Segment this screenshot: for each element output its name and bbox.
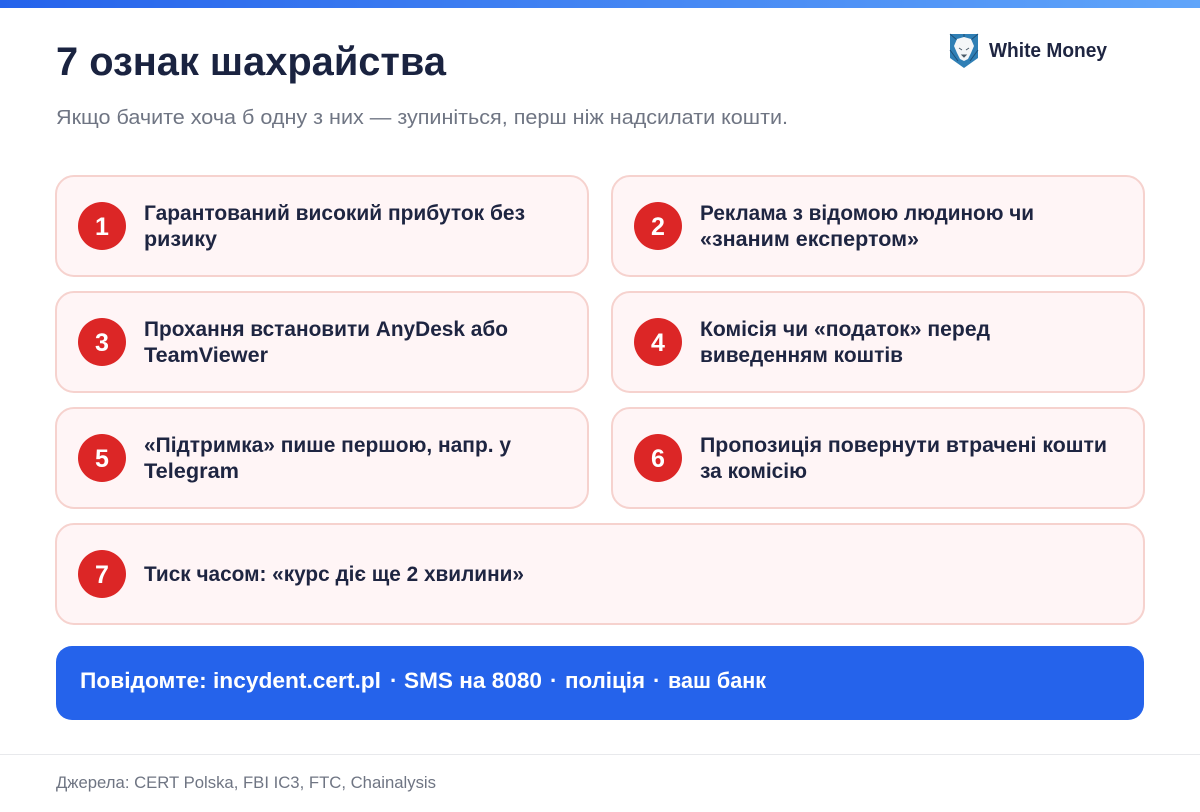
number badge 4: 4	[651, 329, 665, 357]
subtitle: Якщо бачите хоча б одну з них — зупиніться, перш ніж надсилати кошти.	[56, 107, 788, 129]
number badge 7	[78, 550, 126, 598]
card 6 text: за комісію	[700, 460, 807, 483]
banner text	[80, 668, 767, 693]
card 4 text	[700, 318, 990, 367]
banner text: ваш банк	[668, 668, 767, 693]
card 1	[56, 176, 588, 276]
top accent bar	[0, 0, 1200, 8]
number badge 6	[634, 434, 682, 482]
number badge 1	[78, 202, 126, 250]
card 6 text	[700, 434, 1107, 483]
number badge 1: 1	[95, 213, 109, 241]
banner text: Повідомте: incydent.cert.pl	[80, 668, 381, 693]
card 4	[612, 292, 1144, 392]
banner text: поліція	[565, 668, 645, 693]
card 5	[56, 408, 588, 508]
number badge 2: 2	[651, 213, 665, 241]
card 3 text	[144, 318, 508, 367]
number badge 3: 3	[95, 329, 109, 357]
card 7	[56, 524, 1144, 624]
card 6 text: Пропозиція повернути втрачені кошти	[700, 434, 1107, 457]
number badge 5: 5	[95, 445, 109, 473]
card 2 text: «знаним експертом»	[700, 228, 919, 251]
number badge 3	[78, 318, 126, 366]
card 3 text: TeamViewer	[144, 344, 268, 367]
banner text: ·	[390, 668, 397, 693]
card 1 text: Гарантований високий прибуток без	[144, 202, 525, 225]
card 4 text: Комісія чи «податок» перед	[700, 318, 990, 341]
banner text: ·	[653, 668, 660, 693]
card 3	[56, 292, 588, 392]
banner text: ·	[550, 668, 557, 693]
card 2	[612, 176, 1144, 276]
card 1 text	[144, 202, 525, 251]
number badge 2	[634, 202, 682, 250]
card 3 text: Прохання встановити AnyDesk або	[144, 318, 508, 341]
number badge 7: 7	[95, 561, 109, 589]
card 5 text	[144, 434, 511, 483]
number badge 5	[78, 434, 126, 482]
card 7 text: Тиск часом: «курс діє ще 2 хвилини»	[144, 563, 524, 586]
card 2 text	[700, 202, 1034, 251]
icon: lion shield	[950, 34, 978, 68]
card 2 text: Реклама з відомою людиною чи	[700, 202, 1034, 225]
logo: White Money	[950, 34, 1108, 68]
report banner	[56, 646, 1144, 720]
card 6	[612, 408, 1144, 508]
number badge 4	[634, 318, 682, 366]
card 4 text: виведенням коштів	[700, 344, 903, 367]
footer sources: Джерела: CERT Polska, FBI IC3, FTC, Chainalysis	[56, 773, 436, 792]
banner text: SMS на 8080	[404, 668, 542, 693]
title: 7 ознак шахрайства	[56, 40, 447, 84]
card 1 text: ризику	[144, 228, 217, 251]
logo wordmark: White Money	[989, 40, 1108, 62]
number badge 6: 6	[651, 445, 665, 473]
card 5 text: Telegram	[144, 460, 239, 483]
card 5 text: «Підтримка» пише першою, напр. у	[144, 434, 511, 457]
